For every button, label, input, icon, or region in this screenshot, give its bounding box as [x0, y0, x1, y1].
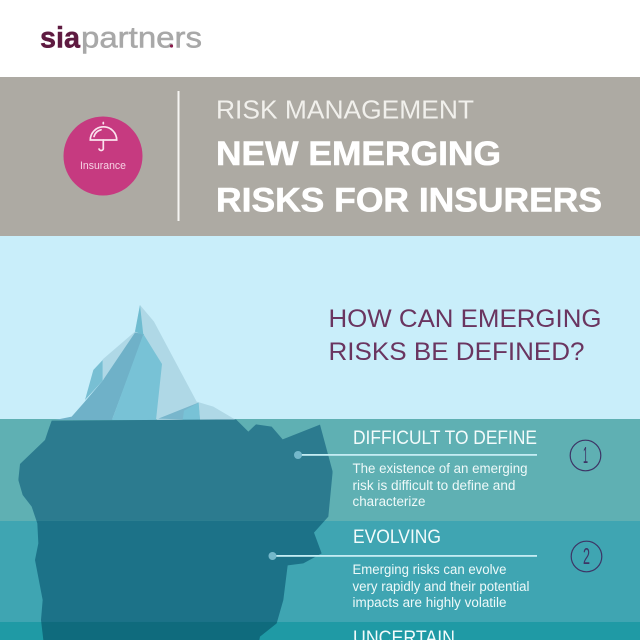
question heading: RISKS BE DEFINED? — [328, 338, 584, 366]
item 2: evolving: Emerging risks can evolve — [352, 562, 506, 577]
number 1: 1 — [583, 442, 588, 468]
header band — [0, 77, 640, 236]
title: RISK MANAGEMENT — [216, 96, 474, 124]
header divider — [178, 91, 180, 221]
item 2: evolving: very rapidly and their potential — [352, 579, 530, 594]
water band 1 — [0, 419, 640, 521]
item 2: evolving — [268, 527, 537, 610]
insurance badge — [64, 116, 142, 196]
item 2: evolving: impacts are highly volatile — [352, 595, 506, 610]
pointer line 2 — [268, 552, 537, 560]
item 1: difficult to define: characterize — [352, 494, 426, 509]
logo — [40, 22, 202, 54]
number 2 — [571, 541, 602, 572]
item 2: evolving: EVOLVING — [353, 527, 441, 548]
logo: sia — [40, 22, 80, 54]
iceberg underwater — [0, 418, 340, 640]
title: RISKS FOR INSURERS — [216, 182, 602, 220]
water band 2 — [0, 521, 640, 622]
item 1: difficult to define: risk is difficult to define and — [352, 478, 516, 493]
pointer line 1 — [294, 451, 537, 459]
title: NEW EMERGING — [216, 135, 501, 173]
question heading: HOW CAN EMERGING — [328, 305, 602, 333]
sky background — [0, 236, 640, 419]
iceberg — [0, 305, 340, 640]
item 1: difficult to define — [294, 428, 537, 509]
icon: umbrella — [90, 122, 117, 150]
item 1: difficult to define: The existence of an emerging — [352, 461, 528, 476]
item 1: difficult to define: DIFFICULT TO DEFINE — [353, 428, 537, 449]
iceberg tip above water — [55, 305, 236, 420]
number 2: 2 — [583, 543, 590, 569]
logo: partners — [81, 22, 202, 54]
badge label: Insurance — [80, 160, 126, 172]
title — [216, 96, 602, 220]
water band 3 — [0, 622, 640, 640]
question heading — [328, 305, 602, 366]
number 1 — [570, 440, 601, 471]
